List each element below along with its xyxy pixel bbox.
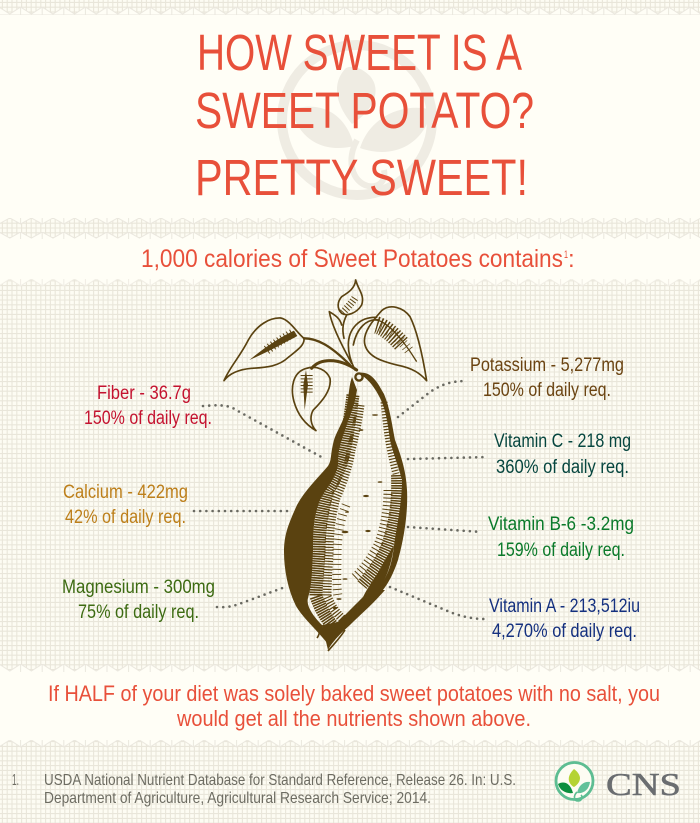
top grid band: [0, 0, 700, 15]
middle grid band: [0, 218, 700, 239]
label: fiber: 150% of daily req.: [84, 408, 212, 429]
label: potassium: [470, 355, 624, 401]
subtitle: :: [568, 246, 575, 273]
right hatching: [362, 475, 397, 585]
label: vitamin A: [489, 596, 640, 642]
footnote: [12, 772, 516, 807]
subtitle: 1,000 calories of Sweet Potatoes contains: [141, 245, 563, 273]
footnote: 1.: [12, 772, 19, 789]
label: vitamin C: 360% of daily req.: [496, 457, 629, 478]
label: potassium: Potassium - 5,277mg: [470, 355, 624, 376]
label: calcium: 42% of daily req.: [65, 507, 186, 528]
label: magnesium: [62, 577, 215, 623]
footer grid panel: [0, 740, 700, 823]
left hatching: [316, 395, 397, 628]
label: potassium: 150% of daily req.: [483, 380, 611, 401]
label: calcium: Calcium - 422mg: [63, 482, 188, 503]
label: magnesium: Magnesium - 300mg: [62, 577, 215, 598]
logo: CNS: CNS: [606, 766, 681, 802]
title: HOW SWEET IS A: [197, 24, 522, 81]
illustration: leaves and stems: [224, 280, 427, 431]
label: magnesium: 75% of daily req.: [78, 602, 199, 623]
bottom edge and tip: [322, 590, 385, 650]
illustration: sweet potato body: [284, 373, 407, 651]
left solid shading: [284, 377, 357, 644]
title: SWEET POTATO?: [195, 82, 534, 139]
conclusion text: [48, 681, 660, 731]
footnote: USDA National Nutrient Database for Standard Reference, Release 26. In: U.S.: [44, 772, 516, 789]
crown: [355, 373, 363, 381]
label: vitamin A: Vitamin A - 213,512iu: [489, 596, 640, 617]
title: PRETTY SWEET!: [195, 149, 528, 206]
leaf veins: [249, 297, 417, 410]
label: vitamin C: [494, 431, 631, 478]
footnote: Department of Agriculture, Agricultural Research Service; 2014.: [44, 790, 431, 807]
label: vitamin B-6: 159% of daily req.: [497, 540, 625, 561]
main grid panel: [0, 279, 700, 672]
subtitle: 1: [564, 249, 568, 261]
watermark logo behind title: [282, 45, 432, 195]
skin specks: [333, 414, 382, 609]
label: vitamin A: 4,270% of daily req.: [492, 621, 637, 642]
label: vitamin B-6: Vitamin B-6 -3.2mg: [488, 514, 634, 535]
label: fiber: [84, 383, 212, 429]
label: calcium: [63, 482, 188, 528]
conclusion text: would get all the nutrients shown above.: [176, 706, 531, 731]
label: vitamin B-6: [488, 514, 634, 561]
right solid edge: [355, 373, 407, 616]
label: fiber: Fiber - 36.7g: [97, 383, 191, 404]
logo: CNS: [556, 762, 681, 802]
dotted connector lines: [194, 381, 487, 619]
label: vitamin C: Vitamin C - 218 mg: [494, 431, 631, 452]
title: [195, 24, 534, 206]
lower right shading: [358, 545, 394, 612]
